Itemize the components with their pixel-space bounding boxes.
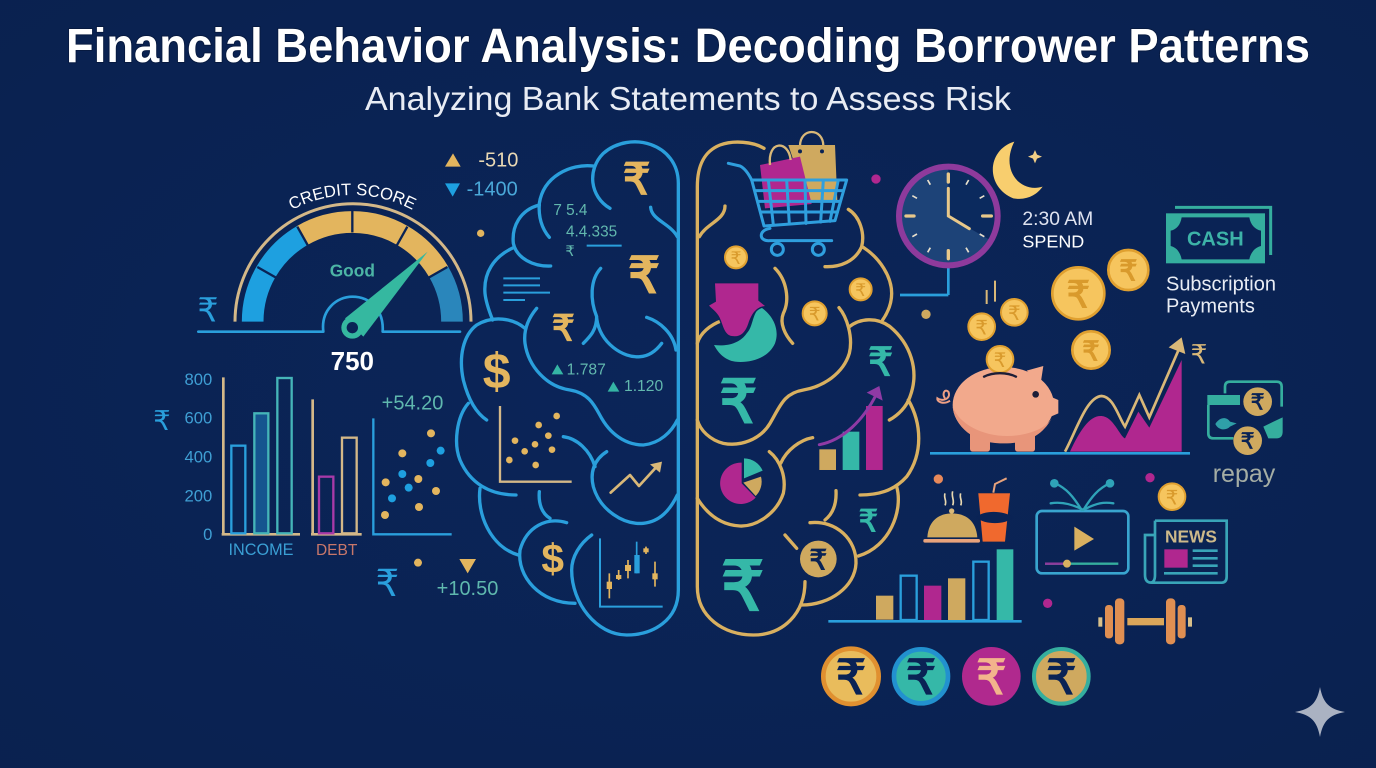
income bar chart: 600 bbox=[185, 409, 212, 428]
panel: late spending and savings bbox=[899, 142, 1283, 455]
delta figures: -1400 bbox=[467, 179, 518, 201]
rupee and dollar symbols: ₹ bbox=[623, 156, 650, 204]
text lines icon bbox=[503, 278, 550, 300]
spend time label: SPEND bbox=[1022, 231, 1084, 251]
repay label: repay bbox=[1213, 460, 1276, 488]
icon: piggy bank: ₹ bbox=[994, 350, 1006, 372]
icon: news bbox=[1145, 521, 1227, 583]
icon: hat and crescent bbox=[709, 283, 777, 362]
rupee symbols: ₹ bbox=[868, 340, 893, 384]
brain outline right bbox=[697, 142, 919, 635]
icon: small coins bbox=[725, 246, 872, 325]
rupee and dollar symbols: ₹ bbox=[552, 308, 575, 349]
rupee symbols: ₹ bbox=[859, 504, 878, 538]
income bar chart: 400 bbox=[185, 447, 212, 466]
income bar chart bbox=[153, 370, 300, 559]
icon: crescent moon bbox=[993, 142, 1043, 199]
row of rupee coins: ₹ bbox=[836, 651, 866, 705]
debt bar chart: DEBT bbox=[316, 542, 358, 559]
delta figures bbox=[445, 150, 518, 237]
icon: pie chart bbox=[720, 458, 763, 504]
icon: cash note bbox=[1166, 207, 1271, 263]
brain figures: 1.120 bbox=[624, 378, 663, 395]
icon: small coins: ₹ bbox=[809, 303, 821, 324]
icon: gold coins: ₹ bbox=[975, 317, 988, 339]
spend time label bbox=[1022, 209, 1093, 251]
income bar chart: INCOME bbox=[228, 540, 293, 559]
income bar chart: 800 bbox=[185, 370, 212, 389]
title: Financial Behavior Analysis: Decoding Borrower Patterns bbox=[66, 20, 1310, 73]
icon: repayment wallet bbox=[1207, 382, 1283, 455]
icon: shopping cart bbox=[728, 163, 847, 255]
gauge value: 750 bbox=[331, 346, 374, 376]
gauge rating: Good bbox=[330, 261, 375, 281]
icon: sparkle watermark bbox=[1295, 687, 1345, 737]
scatter icon bbox=[500, 406, 572, 482]
rupee symbols: ₹ bbox=[719, 369, 757, 436]
icon: gold coins bbox=[968, 250, 1148, 369]
icon: piggy bank bbox=[937, 346, 1058, 452]
icon: food cloche bbox=[923, 474, 980, 543]
income bar chart: 0 bbox=[203, 525, 212, 544]
subtitle: Analyzing Bank Statements to Assess Risk bbox=[365, 80, 1012, 117]
brain figures bbox=[552, 202, 663, 395]
decorative markers bbox=[871, 174, 931, 319]
panel: lifestyle spending bbox=[823, 473, 1227, 706]
growth bars with arrow bbox=[819, 386, 883, 470]
panel: credit score and income charts bbox=[153, 184, 498, 604]
icon: news: NEWS bbox=[1165, 527, 1217, 547]
icon: small coins: ₹ bbox=[730, 248, 742, 268]
scatter plot bbox=[373, 392, 452, 534]
row of rupee coins: ₹ bbox=[976, 651, 1007, 705]
rupee and dollar symbols bbox=[483, 156, 660, 582]
area chart with arrow bbox=[930, 337, 1207, 453]
icon: small coins: ₹ bbox=[855, 280, 866, 300]
area chart with arrow: ₹ bbox=[1191, 339, 1207, 369]
credit score gauge bbox=[197, 184, 472, 376]
rupee and dollar symbols: $ bbox=[541, 536, 564, 582]
brain outline left bbox=[457, 142, 678, 635]
rupee and dollar symbols: ₹ bbox=[628, 248, 660, 304]
subscription label: Subscription bbox=[1166, 274, 1276, 296]
icon: floating coin and marker: ₹ bbox=[1166, 487, 1178, 509]
icon: star bbox=[1028, 150, 1042, 163]
debt bar chart bbox=[311, 399, 362, 559]
bottom delta marker bbox=[375, 559, 498, 604]
spending bar chart bbox=[828, 549, 1022, 621]
credit score gauge: CREDIT SCORE bbox=[289, 184, 417, 210]
delta figures: -510 bbox=[478, 150, 518, 172]
panel: left brain, analytical bbox=[445, 142, 678, 635]
subscription label bbox=[1166, 274, 1276, 318]
candlestick chart bbox=[600, 538, 663, 607]
rupee and dollar symbols: $ bbox=[483, 343, 511, 399]
icon: floating coin and marker bbox=[1145, 473, 1185, 510]
icon: gold coins: ₹ bbox=[1066, 273, 1090, 315]
brain figures: 4.4.335 bbox=[566, 224, 617, 241]
bottom delta marker: +10.50 bbox=[437, 578, 498, 600]
icon: drink cup bbox=[976, 478, 1013, 542]
panel: right brain, behavioural bbox=[697, 132, 931, 635]
icon: rupee: ₹ bbox=[197, 293, 219, 330]
icon: dumbbell bbox=[1043, 598, 1192, 644]
bottom delta marker: ₹ bbox=[375, 562, 399, 604]
brain figures: 7 5.4 bbox=[553, 202, 588, 219]
icon: clock bbox=[899, 167, 998, 295]
row of rupee coins: ₹ bbox=[1046, 651, 1077, 705]
icon: video streaming bbox=[1037, 479, 1128, 573]
subscription label: Payments bbox=[1166, 296, 1255, 318]
icon: rupee medallion bbox=[800, 541, 837, 577]
gauge needle bbox=[341, 252, 428, 339]
icon: trend arrow bbox=[611, 462, 662, 493]
spend time label: 2:30 AM bbox=[1022, 209, 1093, 230]
row of rupee coins bbox=[823, 647, 1089, 706]
row of rupee coins: ₹ bbox=[906, 651, 936, 705]
icon: gold coins: ₹ bbox=[1119, 256, 1137, 288]
scatter plot: +54.20 bbox=[382, 392, 443, 414]
icon: shopping bags bbox=[760, 132, 837, 208]
brain figures: ₹ bbox=[565, 244, 575, 260]
icon: rupee medallion: ₹ bbox=[809, 544, 827, 575]
icon: gold coins: ₹ bbox=[1008, 303, 1021, 325]
income bar chart: ₹ bbox=[153, 405, 171, 436]
icon: cash note: CASH bbox=[1187, 229, 1244, 251]
icon: gold coins: ₹ bbox=[1082, 335, 1100, 366]
gauge label: credit score bbox=[224, 195, 481, 323]
rupee symbols: ₹ bbox=[721, 549, 764, 625]
income bar chart: 200 bbox=[185, 486, 212, 505]
rupee symbols bbox=[719, 340, 893, 625]
brain figures: 1.787 bbox=[567, 361, 606, 378]
icon: repayment wallet: ₹ bbox=[1251, 389, 1265, 414]
icon: repayment wallet: ₹ bbox=[1241, 428, 1255, 453]
